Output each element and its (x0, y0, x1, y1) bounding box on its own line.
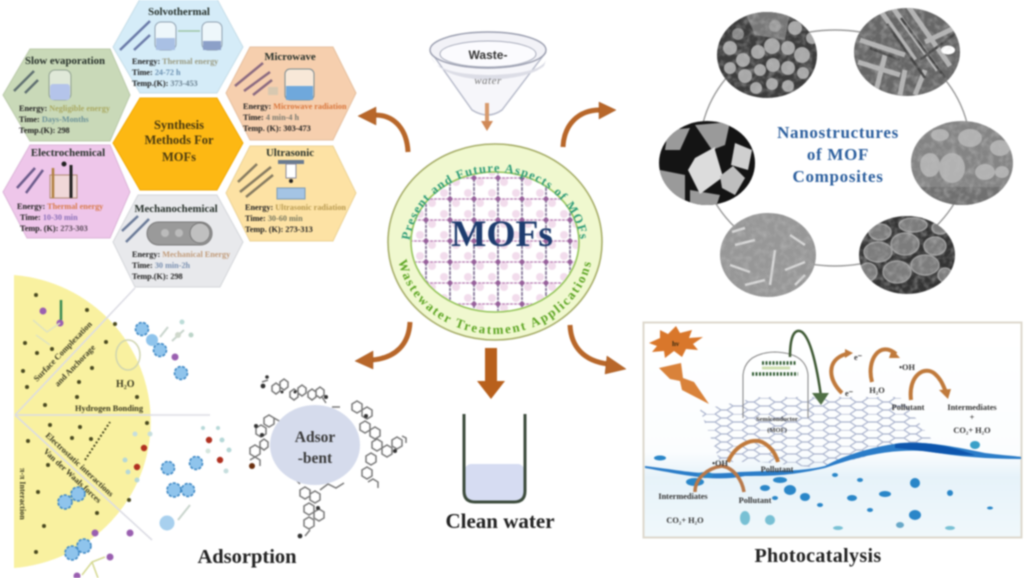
arrow: funnel to MOFs (481, 103, 493, 131)
mechanism labels: H₂O (116, 379, 135, 390)
reaction labels: Pollutant (892, 403, 925, 412)
purple ions and bond (33, 300, 178, 578)
icon: wastewater funnel: Waste- (469, 48, 507, 62)
icon: lightning (659, 363, 709, 404)
hexagon: electrochemical: Electrochemical (31, 147, 105, 159)
dark atoms on branches (249, 375, 397, 538)
nanostructures title: Nanostructures (777, 123, 899, 142)
SEM image 1 (717, 12, 818, 98)
icon: wastewater funnel (430, 32, 546, 115)
hexagon: mechanochemical: Temp.(K): 298 (132, 272, 183, 281)
reaction labels: •OH (712, 459, 728, 468)
label: adsorption: Adsorption (197, 546, 297, 568)
arrows: orange reaction cycles (695, 349, 951, 492)
central MOFs badge (386, 142, 604, 342)
icon: sun: hν (672, 340, 680, 348)
pollutant molecules: blue aromatic rings (58, 322, 202, 560)
hexagon: mechanochemical: Energy: Mechanical Energy (132, 250, 231, 259)
mechanism labels: Hydrogen Bonding (75, 404, 144, 413)
panel: nanostructures of MOF composites (659, 6, 1013, 297)
mechanism labels: Electrostatic interactions (44, 431, 116, 499)
reaction labels: e⁻ (854, 353, 862, 362)
hexagon: solvothermal (113, 0, 243, 93)
hexagon: electrochemical: Time: 10-30 min (20, 213, 78, 222)
hexagon: microwave: Time: 4 min-4 h (243, 113, 299, 122)
hexagon: electrochemical (3, 145, 130, 238)
semiconductor band dome: (MOF) (767, 427, 787, 434)
hexagon: ultrasonic: Temp. (K): 273-313 (245, 225, 313, 234)
hexagon: slow evaporation (3, 49, 130, 141)
hexagon: centre title (113, 98, 243, 190)
reaction labels: CO₂+ H₂O (666, 516, 704, 525)
label: photocatalysis: Photocatalysis (754, 545, 882, 567)
hexagon: solvothermal: Solvothermal (148, 6, 210, 18)
connecting ring (700, 30, 970, 266)
MOFs label: MOFs (451, 214, 553, 255)
arrow: to adsorption (355, 322, 410, 369)
nanostructures title: Composites (792, 167, 884, 186)
mechanism labels (18, 319, 144, 520)
SEM image 3 (911, 121, 1013, 205)
water droplets (654, 441, 993, 530)
hexagon: ultrasonic: Time: 30-60 min (245, 214, 303, 223)
semiconductor band dome: Semiconductor (756, 416, 798, 423)
hexagon: electrochemical: Temp. (K): 273-303 (20, 224, 88, 233)
SEM image 6 (659, 121, 755, 210)
reaction labels: H₂O (869, 386, 885, 395)
mechanism labels: π-π Interaction (18, 468, 27, 520)
MOF lattice (412, 173, 578, 311)
hexagon: slow evaporation: Slow evaporation (25, 55, 105, 67)
panel: synthesis methods hexagons (3, 0, 356, 287)
hexagon: slow evaporation: Temp.(K): 298 (19, 126, 70, 135)
circular title top: Present and Future Aspects of MOFs (400, 164, 588, 241)
hexagon: ultrasonic: Ultrasonic (266, 147, 314, 159)
semiconductor lattice (700, 397, 932, 468)
reaction labels: Pollutant (761, 465, 794, 474)
reaction labels: Pollutant (739, 496, 772, 505)
hexagon: centre title: Synthesis (154, 118, 204, 132)
reaction labels: CO₂+ H₂O (953, 426, 991, 435)
hexagon: slow evaporation: Time: Days-Months (19, 115, 89, 124)
adsorbent with attached molecular branches (249, 375, 406, 538)
hexagon: mechanochemical: Time: 30 min-2h (132, 261, 191, 270)
semiconductor band dome (743, 352, 808, 434)
reaction labels: e⁻ (845, 389, 853, 398)
label: clean water: Clean water (445, 509, 555, 533)
SEM image 2 (853, 7, 961, 97)
arrow: to photocatalysis (570, 325, 626, 374)
hexagon: mechanochemical (113, 195, 243, 287)
reaction labels: •OH (899, 363, 915, 372)
reaction labels: Intermediates (658, 492, 708, 501)
adsorbent with attached molecular branches: -bent (298, 450, 333, 467)
molecular branches (250, 379, 406, 536)
hexagon: centre title: Methods For (144, 133, 214, 147)
circular title bottom: Wastewater Treatment Applications (398, 258, 592, 336)
hexagon: solvothermal: Energy: Thermal energy (132, 57, 219, 66)
hexagon: microwave: Energy: Microwave radiation (243, 102, 347, 111)
icon: wastewater funnel: water (474, 75, 502, 87)
water surface (645, 443, 1022, 478)
arrow: to synthesis (358, 107, 408, 152)
mechanism labels: Van der Waals forces (42, 447, 103, 505)
pollutant molecules: connecting bonds and atoms (85, 320, 232, 530)
SEM image 4 (859, 216, 955, 294)
panel: adsorption mechanisms semicircle (14, 275, 232, 578)
arrow: to nanostructures (563, 102, 616, 147)
hexagon: electrochemical: Energy: Thermal energy (17, 202, 104, 211)
hexagon: ultrasonic (226, 146, 356, 241)
mechanism labels: and Anchorage (53, 343, 97, 388)
arrow: green excitation (790, 331, 829, 405)
icon: sun (649, 326, 703, 358)
hexagon: microwave: Temp. (K): 303-473 (243, 124, 311, 133)
arrow: to clean water (477, 348, 505, 399)
reaction labels: + (970, 413, 975, 422)
panel: photocatalysis (644, 322, 1022, 538)
hexagon: centre title: MOFs (162, 150, 196, 164)
icon: clean water beaker (464, 414, 525, 502)
hexagon: solvothermal: Time: 24-72 h (132, 68, 181, 77)
hexagon: microwave (226, 47, 356, 140)
hexagon: microwave: Microwave (264, 51, 316, 63)
hexagon: mechanochemical: Mechanochemical (134, 203, 218, 215)
reaction labels (658, 353, 997, 525)
hexagon: solvothermal: Temp.(K): 373-453 (132, 79, 198, 88)
adsorption site dots (21, 293, 149, 554)
nanostructures title (777, 123, 899, 186)
hexagon: slow evaporation: Energy: Negligible energy (19, 104, 111, 113)
SEM image 5 (720, 213, 816, 297)
adsorbent with attached molecular branches: Adsor (295, 429, 335, 446)
hexagon: ultrasonic: Energy: Ultrasonic radiation (245, 203, 346, 212)
mechanism labels: Surface Complexation (32, 319, 94, 383)
reaction labels: Intermediates (947, 403, 997, 412)
nanostructures title: of MOF (807, 145, 869, 164)
